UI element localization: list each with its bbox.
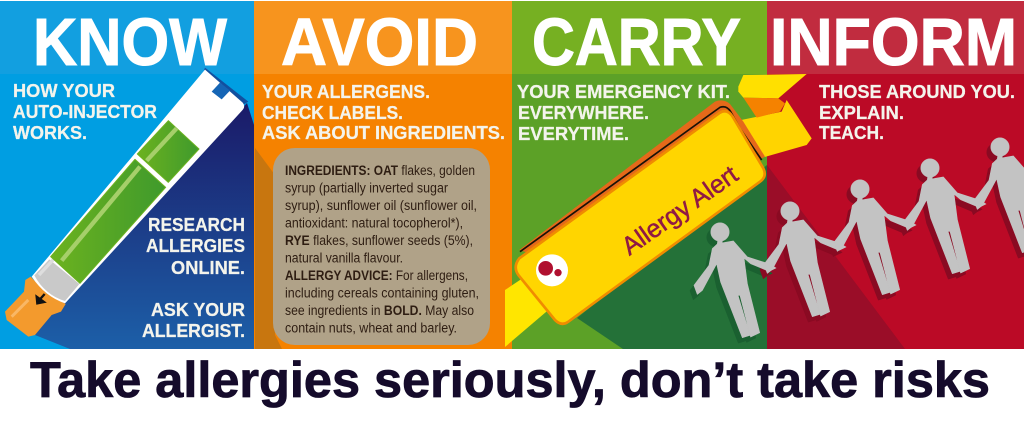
figure 5 bbox=[974, 138, 1024, 253]
panel: inform bbox=[767, 1, 1024, 349]
text: how your auto-injector works bbox=[13, 80, 157, 143]
heading: avoid: AVOID bbox=[281, 5, 478, 80]
figure 3 bbox=[834, 180, 916, 295]
text: your allergens: YOUR ALLERGENS. bbox=[262, 81, 430, 102]
text: ingredients: RYE flakes, sunflower seeds (5%), bbox=[285, 233, 473, 248]
text: those around you: EXPLAIN. bbox=[819, 102, 904, 123]
text: ingredients: syrup (partially inverted sugar bbox=[285, 180, 448, 196]
panel: carry bbox=[512, 1, 767, 349]
heading: know: KNOW bbox=[33, 5, 228, 80]
text: those around you: THOSE AROUND YOU. bbox=[819, 81, 1015, 102]
figure 4 bbox=[904, 159, 986, 274]
text: your emergency kit bbox=[517, 81, 730, 144]
text: research and ask: ALLERGIST. bbox=[142, 320, 245, 341]
text: research and ask: RESEARCH bbox=[148, 214, 245, 235]
text: ingredients: ALLERGY ADVICE: For allergens, bbox=[285, 268, 468, 283]
text: ingredients bbox=[285, 163, 479, 336]
text: ingredients: contain nuts, wheat and barley. bbox=[285, 320, 457, 336]
figure shadows bbox=[690, 143, 1024, 343]
text: ingredients: INGREDIENTS: OAT flakes, golden bbox=[285, 163, 475, 178]
text: your allergens: ASK ABOUT INGREDIENTS. bbox=[262, 122, 505, 143]
text: your emergency kit: YOUR EMERGENCY KIT. bbox=[517, 81, 730, 102]
text: how your auto-injector works: HOW YOUR bbox=[13, 80, 115, 101]
text: research and ask: ASK YOUR bbox=[151, 299, 245, 320]
text: your emergency kit: EVERYWHERE. bbox=[518, 102, 649, 123]
text: those around you bbox=[819, 81, 1015, 143]
text: allergy alert: Allergy Alert bbox=[617, 161, 743, 261]
figure 1 bbox=[694, 223, 776, 338]
figures holding hands bbox=[694, 138, 1024, 338]
text: ingredients: antioxidant: natural tocopherol*), bbox=[285, 216, 463, 230]
text: those around you: TEACH. bbox=[819, 122, 884, 143]
text: ingredients: natural vanilla flavour. bbox=[285, 250, 403, 266]
text: research and ask: ALLERGIES bbox=[146, 235, 245, 256]
long shadow of injector bbox=[30, 103, 255, 349]
panel: ingredients label bbox=[273, 148, 490, 345]
long shadow of alert card bbox=[577, 165, 767, 349]
text: your allergens: CHECK LABELS. bbox=[262, 102, 403, 123]
text: your allergens bbox=[262, 81, 505, 143]
icon: auto-injector pen bbox=[5, 68, 248, 337]
text: ingredients: including cereals containing gluten, bbox=[285, 286, 479, 300]
slogan: Take allergies seriously, don’t take risks bbox=[30, 352, 990, 408]
heading: carry: CARRY bbox=[532, 5, 741, 80]
text: your emergency kit: EVERYTIME. bbox=[518, 123, 629, 144]
text: how your auto-injector works: AUTO-INJECTOR bbox=[13, 101, 157, 122]
panel: avoid bbox=[254, 1, 512, 349]
long shadow of alert card bbox=[767, 165, 905, 349]
figure 2 bbox=[764, 202, 846, 317]
text: research and ask bbox=[142, 214, 245, 341]
text: ingredients: syrup), sunflower oil (sunflower oil, bbox=[285, 198, 477, 213]
text: ingredients: see ingredients in BOLD. May also bbox=[285, 303, 474, 318]
icon: alert card with strap bbox=[505, 74, 812, 347]
long shadow of label bbox=[255, 148, 282, 349]
text: research and ask: ONLINE. bbox=[171, 257, 245, 278]
text: how your auto-injector works: WORKS. bbox=[13, 122, 87, 143]
panel: know bbox=[0, 1, 255, 349]
